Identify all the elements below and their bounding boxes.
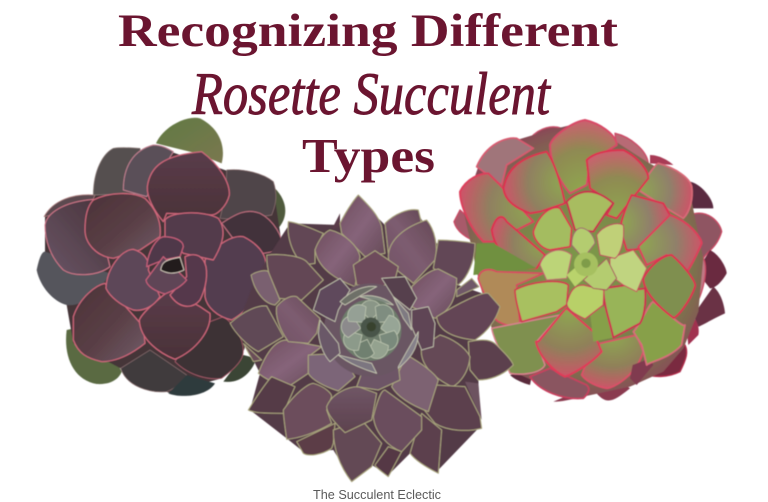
plant: mauve spiky rosette (center) <box>230 195 513 482</box>
rosette heart <box>567 252 598 287</box>
heading line 2: script: Rosette Succulent <box>191 61 551 127</box>
title <box>118 5 618 183</box>
plant center <box>161 257 184 273</box>
plant: dark purple rosette (left) <box>37 118 285 396</box>
heading line 1: Recognizing Different <box>118 5 618 57</box>
green heart of the rosette <box>339 299 402 362</box>
plant: red and green rosette (right) <box>454 120 727 402</box>
heading line 3: Types <box>302 128 435 183</box>
inner grey ring <box>313 277 435 377</box>
credit: The Succulent Eclectic <box>313 488 441 502</box>
